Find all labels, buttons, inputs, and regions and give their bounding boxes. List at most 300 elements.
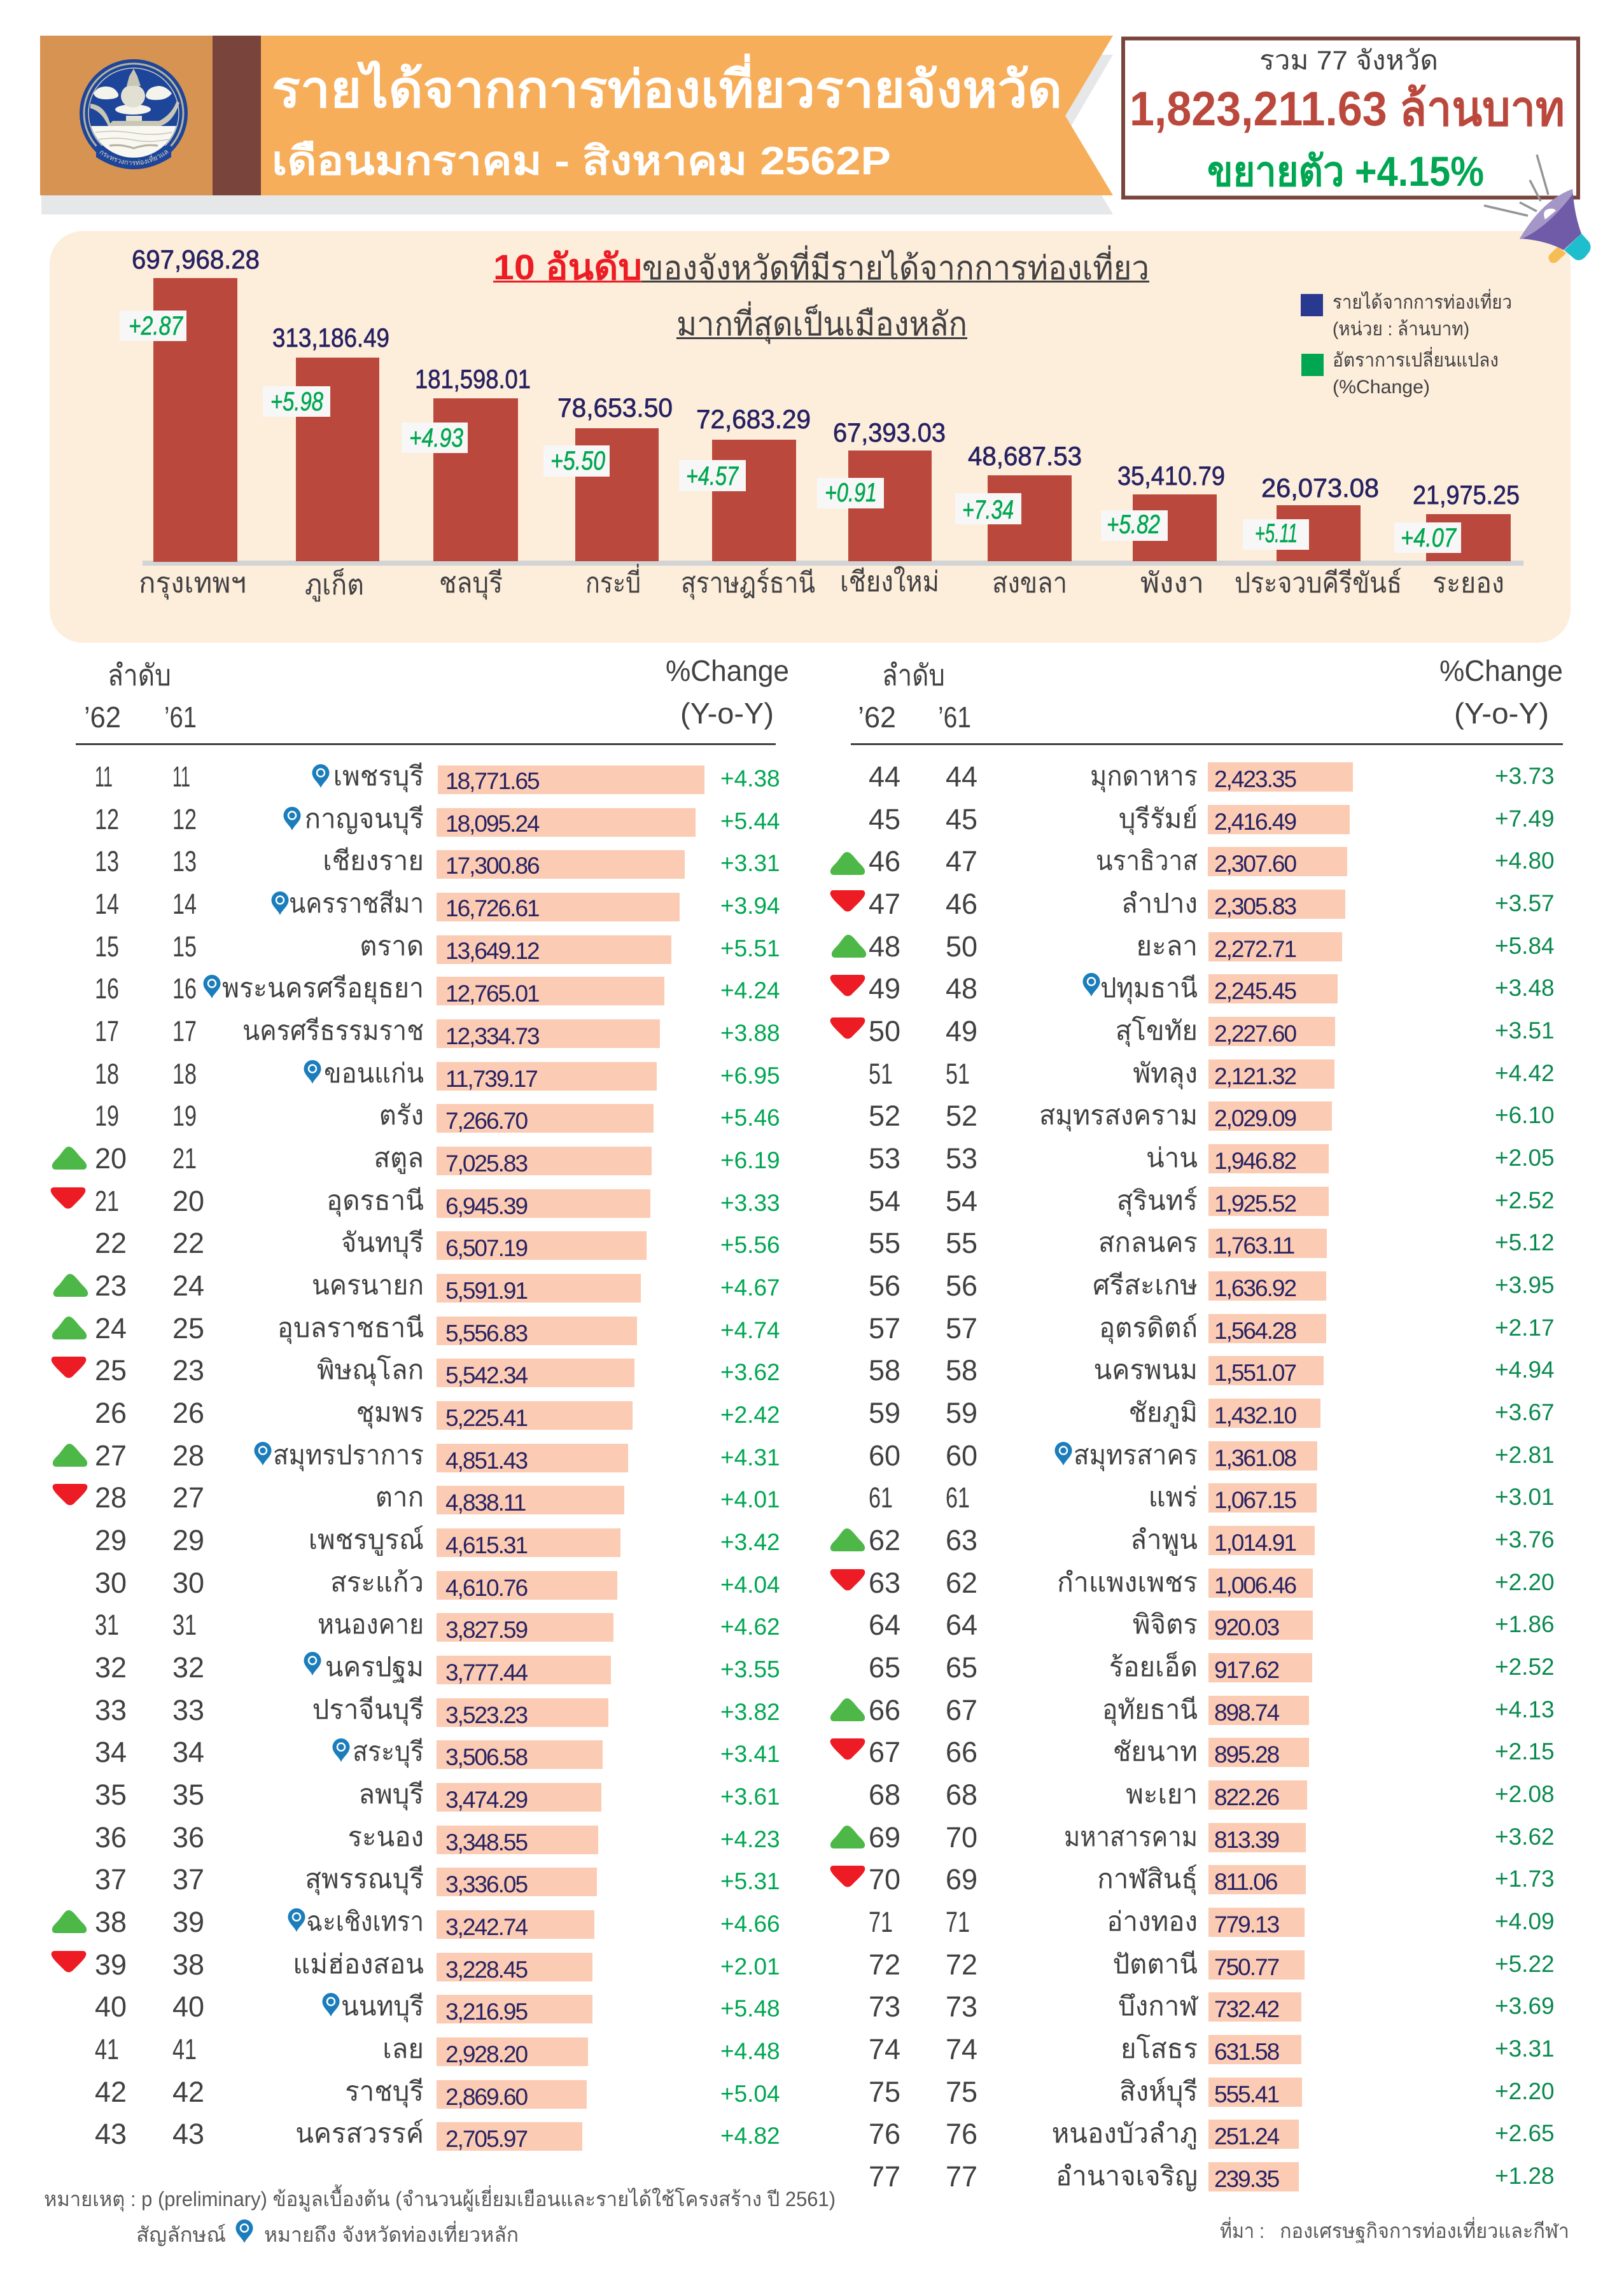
row: อุบลราชธานี: 25 bbox=[172, 1312, 204, 1345]
row: นนทบุรี: นนทบุรี bbox=[341, 1991, 424, 2023]
row: อุทัยธานี bbox=[830, 1694, 1555, 1726]
row: มุกดาหาร: 44 bbox=[946, 760, 977, 793]
row: ตราด: 15 bbox=[95, 932, 119, 963]
row: นครราชสีมา: 14 bbox=[172, 889, 197, 920]
row: มหาสารคาม: มหาสารคาม bbox=[1064, 1822, 1198, 1852]
bar: สุราษฎร์ธานี: +4.57 bbox=[686, 461, 739, 491]
bar: ประจวบคีรีขันธ์ bbox=[1235, 473, 1402, 599]
row: ลำปาง: +3.57 bbox=[1495, 890, 1555, 916]
row: แพร่ bbox=[869, 1482, 1555, 1514]
bar: ชลบุรี: +4.93 bbox=[409, 423, 463, 452]
row: อุดรธานี: 6,945.39 bbox=[445, 1193, 527, 1219]
row: ปทุมธานี: +3.48 bbox=[1495, 975, 1555, 1001]
bar: สุราษฎร์ธานี: สุราษฎร์ธานี bbox=[681, 568, 815, 600]
row: สุรินทร์: +2.52 bbox=[1495, 1187, 1555, 1213]
symbol legend: หมายถึง จังหวัดท่องเที่ยวหลัก bbox=[264, 2221, 519, 2246]
row: อุทัยธานี: 898.74 bbox=[1214, 1700, 1280, 1726]
row: ยะลา: ยะลา bbox=[1137, 931, 1198, 961]
row: ยโสธร: 631.58 bbox=[1214, 2039, 1279, 2065]
row: เชียงราย: 17,300.86 bbox=[445, 853, 539, 879]
chart baseline bbox=[143, 561, 1523, 566]
row: สิงห์บุรี: 75 bbox=[869, 2076, 900, 2108]
row: สมุทรสงคราม: 52 bbox=[869, 1100, 900, 1132]
row: ยะลา: 50 bbox=[946, 930, 977, 963]
row: กำแพงเพชร: +2.20 bbox=[1495, 1569, 1555, 1595]
row: นครราชสีมา: 14 bbox=[95, 889, 119, 920]
row: พะเยา bbox=[869, 1778, 1555, 1811]
row: นครนายก: 5,591.91 bbox=[445, 1278, 527, 1304]
row: มุกดาหาร: 2,423.35 bbox=[1214, 766, 1296, 792]
row: พิษณุโลก: +3.62 bbox=[720, 1359, 780, 1385]
row: ชัยภูมิ bbox=[869, 1397, 1555, 1429]
bar: ระยอง bbox=[1394, 480, 1520, 599]
total value: 1,823,211.63 ล้านบาท bbox=[1130, 82, 1565, 136]
row: พัทลุง: 51 bbox=[869, 1059, 893, 1090]
row: ลำปาง: 47 bbox=[869, 888, 900, 920]
row: ลำพูน bbox=[830, 1524, 1555, 1556]
row: ระนอง: 36 bbox=[172, 1821, 204, 1854]
row: ฉะเชิงเทรา: 3,242.74 bbox=[445, 1914, 528, 1940]
row: ตาก: 4,838.11 bbox=[445, 1490, 526, 1516]
row: นครปฐม: 3,777.44 bbox=[445, 1660, 528, 1686]
icon: megaphone bbox=[1484, 155, 1591, 263]
row: หนองบัวลำภู: 251.24 bbox=[1214, 2123, 1280, 2149]
row: สิงห์บุรี: 555.41 bbox=[1214, 2081, 1279, 2107]
row: ลพบุรี: ลพบุรี bbox=[358, 1779, 424, 1811]
row: พิษณุโลก bbox=[52, 1354, 780, 1388]
row: บุรีรัมย์: 45 bbox=[869, 803, 900, 835]
row: สมุทรสาคร: +2.81 bbox=[1495, 1442, 1555, 1468]
row: พิจิตร bbox=[869, 1609, 1555, 1641]
row: อ่างทอง: 71 bbox=[869, 1907, 893, 1938]
row: ตาก: +4.01 bbox=[720, 1486, 780, 1513]
row: สกลนคร: 55 bbox=[869, 1227, 900, 1259]
row: สมุทรสงคราม: 52 bbox=[946, 1100, 977, 1132]
row: ปัตตานี: 750.77 bbox=[1214, 1954, 1279, 1980]
row: พัทลุง bbox=[869, 1058, 1555, 1090]
row: บึงกาฬ: 73 bbox=[946, 1990, 977, 2023]
bar: พังงา: +5.82 bbox=[1107, 509, 1160, 539]
row: กาฬสินธุ์: กาฬสินธุ์ bbox=[1097, 1864, 1198, 1896]
header banner bbox=[40, 36, 1113, 214]
row: กาฬสินธุ์: +1.73 bbox=[1495, 1866, 1555, 1892]
row: ชุมพร: ชุมพร bbox=[356, 1397, 424, 1429]
row: กาญจนบุรี: 18,095.24 bbox=[445, 811, 540, 837]
row: ยโสธร: +3.31 bbox=[1495, 2036, 1555, 2062]
table header: left: ’62 bbox=[84, 701, 121, 734]
bar: กระบี่: +5.50 bbox=[550, 445, 606, 475]
row: ศรีสะเกษ: 1,636.92 bbox=[1214, 1275, 1296, 1301]
row: เพชรบูรณ์: 29 bbox=[95, 1524, 127, 1556]
row: ปทุมธานี: ปทุมธานี bbox=[1100, 973, 1198, 1005]
row: นครสวรรค์: 2,705.97 bbox=[445, 2126, 527, 2152]
row: สระบุรี bbox=[95, 1736, 780, 1770]
bar: กระบี่: 78,653.50 bbox=[557, 393, 673, 423]
row: ปราจีนบุรี: 3,523.23 bbox=[445, 1702, 527, 1728]
row: บึงกาฬ: 73 bbox=[869, 1990, 900, 2023]
row: หนองคาย: 3,827.59 bbox=[445, 1617, 527, 1643]
row: แพร่: แพร่ bbox=[1149, 1482, 1198, 1512]
row: หนองคาย bbox=[95, 1609, 780, 1643]
row: มหาสารคาม: 813.39 bbox=[1214, 1827, 1279, 1853]
row: นครนายก: +4.67 bbox=[720, 1275, 780, 1301]
row: นครราชสีมา: +3.94 bbox=[720, 893, 780, 919]
growth: ขยายตัว +4.15% bbox=[1207, 148, 1484, 195]
row: สมุทรสงคราม: 2,029.09 bbox=[1214, 1105, 1296, 1131]
row: สุรินทร์: 1,925.52 bbox=[1214, 1191, 1296, 1217]
row: ปทุมธานี: 2,245.45 bbox=[1214, 978, 1296, 1004]
legend: (%Change) bbox=[1333, 377, 1430, 398]
row: นครราชสีมา: 16,726.61 bbox=[445, 895, 539, 921]
row: ตราด: ตราด bbox=[360, 931, 424, 961]
row: ศรีสะเกษ: 56 bbox=[869, 1269, 900, 1302]
row: ยโสธร: ยโสธร bbox=[1121, 2033, 1198, 2064]
row: เพชรบุรี: 11 bbox=[172, 760, 190, 793]
row: เชียงราย: 13 bbox=[172, 846, 197, 877]
table header: left: %Change bbox=[666, 654, 789, 687]
symbol legend bbox=[136, 2219, 519, 2246]
row: สมุทรปราการ: +4.31 bbox=[720, 1444, 780, 1471]
row: ปราจีนบุรี bbox=[95, 1694, 780, 1728]
row: อุทัยธานี: +4.13 bbox=[1495, 1696, 1555, 1722]
row: หนองบัวลำภู: 76 bbox=[869, 2118, 900, 2150]
row: มุกดาหาร: 44 bbox=[869, 760, 900, 793]
row: ระนอง: 3,348.55 bbox=[445, 1829, 528, 1855]
row: น่าน: 1,946.82 bbox=[1214, 1148, 1296, 1174]
row: พิษณุโลก: พิษณุโลก bbox=[317, 1354, 424, 1387]
row: หนองคาย: 31 bbox=[172, 1610, 197, 1641]
table header: left: ’61 bbox=[164, 701, 197, 734]
row: เชียงราย: 13 bbox=[95, 846, 119, 877]
row: พัทลุง: +4.42 bbox=[1495, 1060, 1555, 1086]
row: อุดรธานี: อุดรธานี bbox=[326, 1185, 424, 1217]
bar: พังงา bbox=[1101, 461, 1225, 599]
row: เพชรบุรี: +4.38 bbox=[720, 765, 780, 792]
footnote: หมายเหตุ : p (preliminary) ข้อมูลเบื้องต้น (จำนวนผู้เยี่ยมเยือนและรายได้ใช้โครงสร้าง ปี 2561) bbox=[44, 2184, 836, 2212]
row: นนทบุรี: +5.48 bbox=[720, 1995, 780, 2022]
table header: right bbox=[851, 654, 1563, 745]
bar: พังงา: 35,410.79 bbox=[1117, 461, 1225, 491]
row: สมุทรสาคร: 60 bbox=[869, 1439, 900, 1472]
row: นราธิวาส: +4.80 bbox=[1495, 848, 1555, 874]
row: ชัยภูมิ: 59 bbox=[946, 1397, 977, 1429]
row: หนองคาย: 31 bbox=[95, 1610, 119, 1641]
row: อุดรธานี: +3.33 bbox=[720, 1190, 780, 1216]
table header: right: ลำดับ bbox=[882, 659, 945, 692]
row: สมุทรสงคราม bbox=[869, 1100, 1555, 1132]
row: นครปฐม: +3.55 bbox=[720, 1656, 780, 1682]
row: ร้อยเอ็ด bbox=[869, 1651, 1555, 1684]
row: กาฬสินธุ์: 69 bbox=[946, 1863, 977, 1896]
chart title: 10 อันดับ bbox=[493, 247, 642, 287]
row: สุพรรณบุรี: 37 bbox=[95, 1863, 127, 1896]
table header: right: ’62 bbox=[858, 701, 896, 734]
source: กองเศรษฐกิจการท่องเที่ยวและกีฬา bbox=[1280, 2217, 1569, 2244]
row: สระบุรี: 34 bbox=[95, 1736, 127, 1768]
bar: ประจวบคีรีขันธ์: +5.11 bbox=[1255, 518, 1298, 548]
row: อ่างทอง: 779.13 bbox=[1214, 1911, 1279, 1938]
row: บุรีรัมย์: 2,416.49 bbox=[1214, 809, 1296, 835]
row: สมุทรสาคร bbox=[869, 1439, 1555, 1472]
row: นราธิวาส: 47 bbox=[946, 845, 977, 877]
bar: พังงา: พังงา bbox=[1140, 568, 1204, 599]
total label: รวม 77 จังหวัด bbox=[1259, 45, 1438, 75]
row: ระนอง: +4.23 bbox=[720, 1826, 780, 1852]
row: ยโสธร: 74 bbox=[869, 2033, 900, 2065]
row: พระนครศรีอยุธยา: 12,765.01 bbox=[445, 981, 539, 1007]
row: ปัตตานี: ปัตตานี bbox=[1112, 1949, 1198, 1979]
bar: ระยอง: 21,975.25 bbox=[1413, 480, 1520, 510]
row: เชียงราย: +3.31 bbox=[720, 850, 780, 876]
row: ชัยภูมิ: ชัยภูมิ bbox=[1129, 1397, 1198, 1429]
row: อุตรดิตถ์: 1,564.28 bbox=[1214, 1318, 1296, 1344]
row: อ่างทอง: 71 bbox=[946, 1907, 970, 1938]
row: บึงกาฬ: 732.42 bbox=[1214, 1996, 1279, 2022]
row: อุตรดิตถ์: 57 bbox=[869, 1312, 900, 1345]
row: นครปฐม: 32 bbox=[95, 1651, 127, 1684]
row: ร้อยเอ็ด: 917.62 bbox=[1214, 1657, 1279, 1683]
row: สุโขทัย: 50 bbox=[869, 1015, 900, 1047]
row: กำแพงเพชร: 63 bbox=[869, 1567, 900, 1599]
row: อ่างทอง: +4.09 bbox=[1495, 1908, 1555, 1934]
row: ชัยภูมิ: 59 bbox=[869, 1397, 900, 1429]
row: สิงห์บุรี bbox=[869, 2076, 1555, 2108]
bar: เชียงใหม่: เชียงใหม่ bbox=[840, 566, 939, 597]
row: ตราด: 13,649.12 bbox=[445, 938, 539, 964]
logo: ministry seal bbox=[80, 59, 188, 169]
row: ตราด: 15 bbox=[172, 932, 197, 963]
row: สกลนคร: 1,763.11 bbox=[1214, 1233, 1294, 1259]
row: อุบลราชธานี: 5,556.83 bbox=[445, 1320, 527, 1346]
row: เพชรบุรี: 18,771.65 bbox=[445, 768, 540, 794]
row: สุรินทร์ bbox=[869, 1185, 1555, 1217]
row: กำแพงเพชร: 62 bbox=[946, 1567, 977, 1599]
row: มุกดาหาร: +3.73 bbox=[1495, 763, 1555, 789]
row: พิจิตร: พิจิตร bbox=[1133, 1609, 1198, 1639]
symbol legend: สัญลักษณ์ bbox=[136, 2223, 226, 2246]
row: ชุมพร: +2.42 bbox=[720, 1402, 780, 1428]
row: นครพนม: 58 bbox=[946, 1354, 977, 1387]
row: อำนาจเจริญ: 77 bbox=[946, 2160, 977, 2193]
bar: เชียงใหม่: 67,393.03 bbox=[833, 417, 946, 447]
total box bbox=[1123, 38, 1578, 197]
row: สระแก้ว: +4.04 bbox=[720, 1572, 780, 1598]
row: หนองบัวลำภู: +2.65 bbox=[1495, 2120, 1555, 2146]
row: ยะลา: +5.84 bbox=[1495, 933, 1555, 959]
row: อุตรดิตถ์ bbox=[869, 1312, 1555, 1345]
row: นราธิวาส: นราธิวาส bbox=[1096, 846, 1198, 876]
row: ปราจีนบุรี: 33 bbox=[172, 1694, 204, 1726]
row: จันทบุรี bbox=[95, 1227, 780, 1261]
row: กาญจนบุรี: กาญจนบุรี bbox=[305, 804, 424, 835]
row: สมุทรปราการ bbox=[53, 1439, 780, 1474]
row: น่าน: +2.05 bbox=[1495, 1145, 1555, 1171]
row: เชียงราย: เชียงราย bbox=[323, 846, 424, 876]
row: ตรัง: +5.46 bbox=[720, 1105, 780, 1131]
row: สุโขทัย: สุโขทัย bbox=[1116, 1015, 1198, 1047]
legend bbox=[1301, 289, 1512, 398]
row: ลำปาง: ลำปาง bbox=[1121, 888, 1198, 918]
bar: ประจวบคีรีขันธ์: ประจวบคีรีขันธ์ bbox=[1235, 568, 1402, 599]
row: นครศรีธรรมราช bbox=[95, 1016, 780, 1049]
row: ชุมพร: 5,225.41 bbox=[445, 1405, 527, 1431]
row: จันทบุรี: 22 bbox=[95, 1227, 127, 1259]
row: พระนครศรีอยุธยา: +4.24 bbox=[720, 977, 780, 1003]
row: อุดรธานี bbox=[51, 1185, 780, 1219]
row: พิจิตร: +1.86 bbox=[1495, 1611, 1555, 1637]
row: ปราจีนบุรี: 33 bbox=[95, 1694, 127, 1726]
row: สุพรรณบุรี: 37 bbox=[172, 1863, 204, 1896]
row: สุพรรณบุรี bbox=[95, 1863, 780, 1897]
row: สุพรรณบุรี: +5.31 bbox=[720, 1868, 780, 1894]
row: พะเยา: 822.26 bbox=[1214, 1784, 1279, 1810]
row: กำแพงเพชร: กำแพงเพชร bbox=[1057, 1567, 1198, 1597]
row: เลย: เลย bbox=[382, 2034, 424, 2064]
row: ลำพูน: 63 bbox=[946, 1524, 977, 1556]
bar: สุราษฎร์ธานี: 72,683.29 bbox=[696, 404, 811, 434]
row: นครพนม: 1,551.07 bbox=[1214, 1360, 1296, 1386]
row: นครราชสีมา bbox=[95, 888, 780, 921]
row: ตรัง: 7,266.70 bbox=[445, 1108, 528, 1134]
row: ยะลา: 48 bbox=[869, 930, 900, 963]
row: อุบลราชธานี bbox=[52, 1312, 780, 1346]
row: แม่ฮ่องสอน: 39 bbox=[95, 1948, 127, 1981]
row: นครนายก: 23 bbox=[95, 1269, 127, 1302]
row: ชุมพร: 26 bbox=[95, 1397, 127, 1429]
row: นนทบุรี: 40 bbox=[172, 1990, 204, 2023]
chart title bbox=[493, 245, 1149, 344]
row: ตาก: 28 bbox=[95, 1481, 127, 1514]
row: มหาสารคาม bbox=[830, 1821, 1555, 1854]
row: ชัยภูมิ: +3.67 bbox=[1495, 1399, 1555, 1425]
row: ขอนแก่น bbox=[95, 1058, 780, 1092]
row: พัทลุง: 51 bbox=[946, 1059, 970, 1090]
row: ยโสธร: 74 bbox=[946, 2033, 977, 2065]
row: ศรีสะเกษ: 56 bbox=[946, 1269, 977, 1302]
row: สิงห์บุรี: +2.20 bbox=[1495, 2078, 1555, 2104]
row: เลย bbox=[95, 2034, 780, 2067]
row: ระนอง: 36 bbox=[95, 1821, 127, 1854]
row: นราธิวาส bbox=[830, 845, 1555, 877]
row: ยโสธร bbox=[869, 2033, 1555, 2065]
row: ขอนแก่น: 18 bbox=[95, 1059, 119, 1090]
row: นครพนม: +4.94 bbox=[1495, 1357, 1555, 1383]
row: ยะลา: 2,272.71 bbox=[1214, 936, 1296, 962]
source bbox=[1220, 2217, 1569, 2244]
bar: ภูเก็ต: ภูเก็ต bbox=[305, 568, 364, 602]
row: ราชบุรี: 42 bbox=[95, 2076, 127, 2108]
row: สุโขทัย: 49 bbox=[946, 1015, 977, 1047]
row: ลำปาง: 2,305.83 bbox=[1214, 893, 1296, 919]
row: อุทัยธานี: 67 bbox=[946, 1694, 977, 1726]
row: แพร่: 1,067.15 bbox=[1214, 1487, 1296, 1513]
row: นครสวรรค์ bbox=[95, 2118, 780, 2152]
row: เพชรบุรี: เพชรบุรี bbox=[333, 761, 424, 793]
row: นครพนม: นครพนม bbox=[1094, 1355, 1198, 1385]
row: อุบลราชธานี: อุบลราชธานี bbox=[277, 1313, 424, 1345]
row: ลพบุรี: 35 bbox=[172, 1778, 204, 1811]
bar: กรุงเทพฯ: +2.87 bbox=[129, 311, 183, 340]
row: สมุทรสาคร: 60 bbox=[946, 1439, 977, 1472]
row: นครพนม: 58 bbox=[869, 1354, 900, 1387]
row: สระแก้ว: 30 bbox=[172, 1567, 204, 1599]
chart title: มากที่สุดเป็นเมืองหลัก bbox=[676, 301, 967, 344]
row: ขอนแก่น: 11,739.17 bbox=[445, 1066, 537, 1092]
row: สุโขทัย bbox=[830, 1015, 1555, 1047]
table header: left: ลำดับ bbox=[108, 659, 171, 692]
row: สุรินทร์: สุรินทร์ bbox=[1117, 1185, 1198, 1217]
row: นนทบุรี: 40 bbox=[95, 1990, 127, 2023]
row: สมุทรสงคราม: สมุทรสงคราม bbox=[1039, 1100, 1198, 1132]
row: อุทัยธานี: 66 bbox=[869, 1694, 900, 1726]
row: เพชรบูรณ์: 29 bbox=[172, 1524, 204, 1556]
row: สมุทรปราการ: 27 bbox=[95, 1439, 127, 1472]
bar: สงขลา: 48,687.53 bbox=[968, 441, 1082, 471]
table: rank 44-77 bbox=[830, 760, 1555, 2193]
row: มหาสารคาม: 70 bbox=[946, 1821, 977, 1854]
icon: pin bbox=[235, 2219, 253, 2243]
row: นนทบุรี: 3,216.95 bbox=[445, 1999, 528, 2025]
row: ศรีสะเกษ bbox=[869, 1269, 1555, 1302]
row: เชียงราย bbox=[95, 846, 780, 879]
row: จันทบุรี: จันทบุรี bbox=[341, 1227, 424, 1259]
bar: เชียงใหม่ bbox=[817, 417, 946, 597]
row: ชัยนาท: 66 bbox=[946, 1736, 977, 1768]
row: ชัยนาท: +2.15 bbox=[1495, 1738, 1555, 1764]
row: บึงกาฬ: +3.69 bbox=[1495, 1993, 1555, 2019]
row: บุรีรัมย์: บุรีรัมย์ bbox=[1119, 804, 1198, 835]
row: หนองบัวลำภู: หนองบัวลำภู bbox=[1052, 2118, 1198, 2149]
row: สิงห์บุรี: 75 bbox=[946, 2076, 977, 2108]
row: อำนาจเจริญ bbox=[869, 2160, 1555, 2193]
row: บุรีรัมย์ bbox=[869, 803, 1555, 835]
row: กาญจนบุรี: 12 bbox=[95, 804, 119, 835]
row: แพร่: 61 bbox=[946, 1483, 970, 1514]
table header: left bbox=[76, 654, 789, 745]
row: จันทบุรี: 22 bbox=[172, 1227, 204, 1259]
row: สมุทรปราการ: 28 bbox=[172, 1439, 204, 1472]
bar: ชลบุรี: 181,598.01 bbox=[415, 364, 531, 394]
table header: left: (Y-o-Y) bbox=[680, 697, 774, 730]
row: ปัตตานี: 72 bbox=[946, 1948, 977, 1981]
row: น่าน: 53 bbox=[869, 1142, 900, 1175]
row: แม่ฮ่องสอน: +2.01 bbox=[720, 1953, 780, 1980]
row: เพชรบูรณ์: 4,615.31 bbox=[445, 1532, 527, 1558]
legend: (หน่วย : ล้านบาท) bbox=[1333, 319, 1469, 340]
row: กำแพงเพชร bbox=[830, 1567, 1555, 1599]
row: สมุทรปราการ: 4,851.43 bbox=[445, 1448, 527, 1474]
row: พะเยา: +2.08 bbox=[1495, 1781, 1555, 1807]
row: อุบลราชธานี: 24 bbox=[95, 1312, 127, 1345]
row: พัทลุง: พัทลุง bbox=[1133, 1058, 1198, 1090]
bar: ชลบุรี: ชลบุรี bbox=[439, 568, 503, 600]
bar: ภูเก็ต: +5.98 bbox=[270, 386, 323, 416]
row: ลำปาง: 46 bbox=[946, 888, 977, 920]
row: สกลนคร: สกลนคร bbox=[1098, 1227, 1198, 1257]
row: มหาสารคาม: +3.62 bbox=[1495, 1824, 1555, 1850]
row: กาฬสินธุ์ bbox=[830, 1863, 1555, 1896]
row: นราธิวาส: 46 bbox=[869, 845, 900, 877]
row: อุตรดิตถ์: +2.17 bbox=[1495, 1315, 1555, 1341]
row: แพร่: +3.01 bbox=[1495, 1484, 1555, 1510]
row: ศรีสะเกษ: +3.95 bbox=[1495, 1272, 1555, 1298]
row: นครสวรรค์: 43 bbox=[172, 2118, 204, 2150]
row: มุกดาหาร bbox=[869, 760, 1555, 793]
row: ตาก: 27 bbox=[172, 1481, 204, 1514]
row: สุพรรณบุรี: 3,336.05 bbox=[445, 1871, 528, 1897]
row: ชัยนาท: 895.28 bbox=[1214, 1742, 1279, 1768]
row: ร้อยเอ็ด: ร้อยเอ็ด bbox=[1109, 1651, 1198, 1682]
